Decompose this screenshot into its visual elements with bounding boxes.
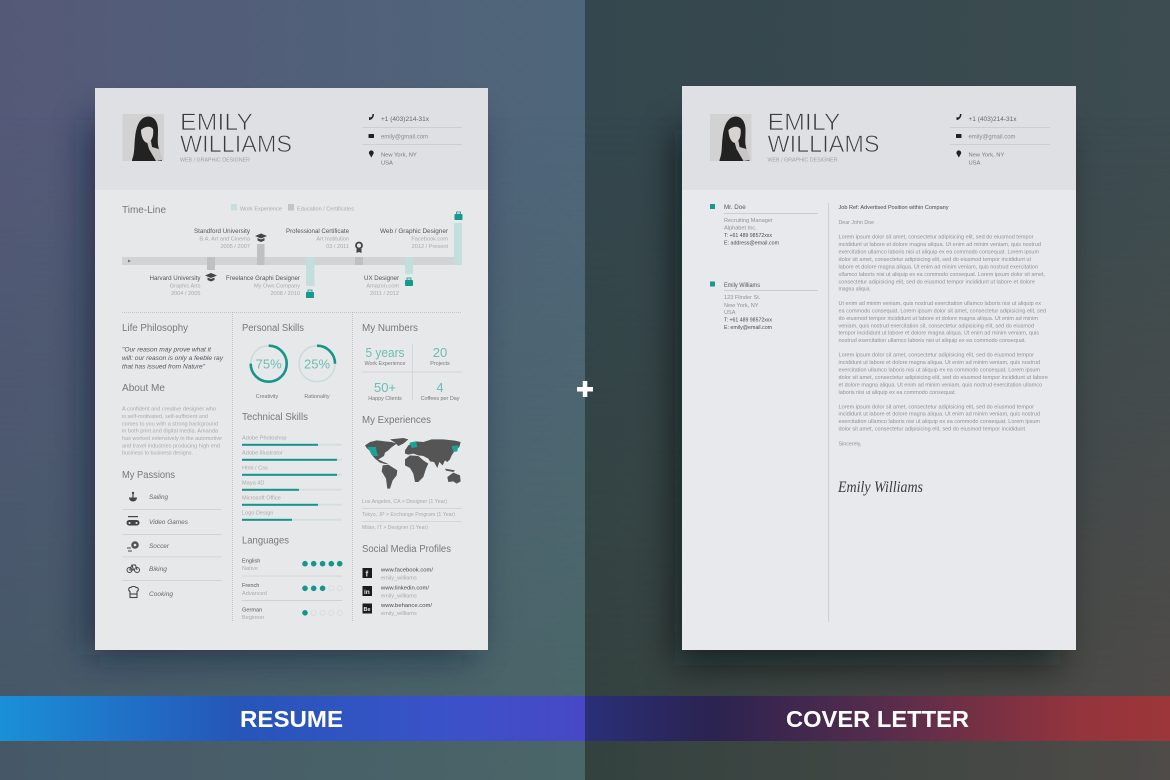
paragraph 1: consectetur adipisicing elit, sed do eiusmod tempor incididunt ut labore et dolore bbox=[838, 279, 1035, 285]
resume header band bbox=[95, 88, 488, 190]
contact details: New York, NY bbox=[381, 152, 417, 158]
quote bbox=[122, 346, 224, 370]
contact details: New York, NY bbox=[968, 152, 1004, 158]
contact details: USA bbox=[381, 160, 393, 166]
timeline entry: Standford: 2005 / 2007 bbox=[220, 244, 250, 250]
icon: plus sign bbox=[577, 381, 593, 397]
heading: my experiences: My Experiences bbox=[362, 415, 431, 426]
profile photo bbox=[122, 114, 164, 161]
donut chart: creativity 75%: Creativity bbox=[256, 394, 279, 400]
heading: technical skills: Technical Skills bbox=[242, 412, 308, 423]
paragraph 2: Ut enim ad minim veniam, quis nostrud exercitation ullamco laboris nisi ut aliquip ex bbox=[838, 301, 1041, 307]
timeline entry: Standford: B.A. Art and Cinema bbox=[199, 236, 251, 242]
social: behance bbox=[362, 603, 432, 617]
banner: cover letter: COVER LETTER bbox=[786, 706, 969, 732]
shadow: resume sheet bbox=[88, 120, 473, 655]
heading: personal skills: Personal Skills bbox=[242, 323, 304, 334]
timeline entry: web designer: Facebook.com bbox=[411, 236, 448, 242]
paragraph 1: ullamco laboris nisi ut aliquip ex ea commodo consequat. Lorem ipsum dolor sit amet, bbox=[838, 272, 1045, 278]
paragraph 3: dolor sit amet, consectetur adipisicing elit, sed do eiusmod tempor incididunt ut labore bbox=[838, 375, 1048, 381]
background: right panel bbox=[585, 0, 1170, 780]
letter body: Job Ref: Advertised Position within Company bbox=[838, 205, 949, 211]
name: EMILY bbox=[768, 109, 840, 136]
skill bars: Microsoft Office bbox=[242, 496, 281, 502]
experience list bbox=[362, 499, 462, 531]
paragraph 3: Lorem ipsum dolor sit amet, consectetur adipisicing elit, sed do eiusmod tempor bbox=[838, 353, 1034, 359]
contact details: USA bbox=[968, 160, 981, 166]
numbers grid: Happy Clients bbox=[368, 396, 402, 402]
language: German: Beginner bbox=[242, 615, 265, 621]
letter body bbox=[837, 205, 1048, 496]
role: WEB / GRAPHIC DESIGNER bbox=[768, 158, 838, 164]
passions list: Biking bbox=[149, 566, 167, 573]
contact details: +1 (403)214-31x bbox=[968, 116, 1017, 123]
numbers grid: 20 bbox=[433, 345, 447, 360]
timeline legend: Education / Certificates bbox=[297, 206, 354, 212]
timeline entry: freelance: 2008 / 2010 bbox=[270, 291, 300, 297]
social: behance: Be bbox=[364, 607, 371, 613]
about text: is self-motivated, self-sufficient and bbox=[122, 414, 208, 420]
timeline entry: freelance: My Own Company bbox=[254, 284, 300, 290]
about text: and travel industries producing high end bbox=[122, 443, 220, 449]
quote: "Our reason may prove what it bbox=[122, 346, 212, 354]
recipient block: Mr. Doe bbox=[724, 204, 746, 211]
skill bars: Adobe Illustrator bbox=[242, 451, 283, 457]
icon: briefcase bbox=[306, 290, 314, 298]
social: behance: www.behance.com/ bbox=[380, 603, 432, 609]
contact details: emily@gmail.com bbox=[381, 134, 428, 140]
column: numbers, experiences, social bbox=[362, 323, 462, 617]
icon: phone bbox=[956, 114, 962, 120]
recipient block: Alphabet Inc. bbox=[724, 226, 757, 232]
timeline chart bbox=[122, 223, 462, 286]
paragraph 1 bbox=[838, 235, 1045, 293]
role: WEB / GRAPHIC DESIGNER bbox=[180, 158, 250, 164]
sender block: T: +61 489 98572xxx bbox=[724, 318, 772, 324]
name: WILLIAMS bbox=[180, 131, 292, 158]
sender block bbox=[710, 282, 818, 331]
icon: phone bbox=[369, 114, 374, 120]
resume paper bbox=[95, 88, 488, 650]
paragraph 3: et dolore magna aliqua. Ut enim ad minim veniam, quis nostrud exercitation ullamco bbox=[838, 382, 1042, 388]
paragraph 2: tempor incididunt ut labore et dolore magna aliqua. Ut enim ad minim veniam, quis bbox=[838, 331, 1039, 337]
paragraph 1: incididunt ut labore et dolore magna aliqua. Ut enim ad minim veniam, quis nostrud bbox=[838, 242, 1041, 248]
paragraph 3: exercitation ullamco laboris nisi ut aliquip ex ea commodo consequat. Lorem ipsum bbox=[838, 368, 1040, 374]
world map bbox=[365, 438, 461, 489]
timeline entry: web designer bbox=[380, 228, 448, 250]
heading: about me: About Me bbox=[122, 383, 165, 394]
recipient block: Recruiting Manager bbox=[724, 218, 773, 224]
numbers grid bbox=[362, 344, 462, 402]
language: German bbox=[242, 608, 342, 621]
contact details bbox=[950, 114, 1050, 166]
icon: briefcase bbox=[405, 278, 413, 286]
timeline entry: certificate: Professional Certificate bbox=[286, 228, 350, 235]
timeline entry: Harvard bbox=[150, 275, 201, 297]
heading: my passions: My Passions bbox=[122, 470, 175, 481]
icon: anchor bbox=[129, 492, 137, 502]
donut chart: creativity 75% bbox=[251, 346, 287, 400]
sender block: Emily Williams bbox=[724, 282, 760, 289]
profile photo bbox=[710, 114, 752, 161]
language: English bbox=[242, 558, 343, 572]
paragraph 1: exercitation ullamco laboris nisi ut aliquip ex ea commodo consequat. Lorem ipsum bbox=[838, 250, 1039, 256]
icon: game controller bbox=[126, 516, 140, 526]
experience list: Los Angeles, CA > Designer (1 Year) bbox=[362, 499, 447, 505]
timeline entry: web designer: 2012 / Present bbox=[412, 244, 448, 250]
heading: my numbers: My Numbers bbox=[362, 323, 418, 334]
name: EMILY bbox=[180, 109, 253, 136]
passions list bbox=[122, 492, 222, 598]
heading: life philosophy: Life Philosophy bbox=[122, 323, 188, 334]
language: English: English bbox=[242, 558, 260, 564]
social: facebook bbox=[362, 568, 433, 582]
timeline entry: Harvard: Graphic Arts bbox=[170, 284, 201, 290]
paragraph 4 bbox=[838, 404, 1040, 433]
paragraph 3 bbox=[838, 353, 1048, 396]
numbers grid: Work Experience bbox=[365, 361, 405, 367]
about text: A confident and creative designer who bbox=[122, 406, 216, 412]
icon: envelope bbox=[368, 134, 374, 138]
icon: award badge bbox=[356, 242, 362, 253]
social: linkedin: emily_williams bbox=[381, 594, 417, 600]
column: skills and languages bbox=[242, 323, 343, 621]
marker bbox=[710, 204, 715, 209]
recipient block: E: address@email.com bbox=[724, 240, 779, 246]
paragraph 2: do eiusmod tempor incididunt ut labore et dolore magna aliqua. Ut enim ad minim bbox=[838, 316, 1038, 322]
about text: business to business designs. bbox=[122, 451, 193, 457]
skill bars: Maya 4D bbox=[242, 481, 264, 487]
quote: will: our reason is only a feeble ray bbox=[122, 355, 224, 362]
heading: time-line: Time-Line bbox=[122, 205, 166, 216]
paragraph 4: exercitation ullamco laboris nisi ut aliquip ex ea commodo consequat. Lorem ipsum bbox=[838, 419, 1040, 425]
paragraph 2: ea commodo consequat. Lorem ipsum dolor sit amet, consectetur adipisicing elit, sed bbox=[838, 308, 1046, 314]
name bbox=[768, 109, 880, 158]
shadow: cover letter sheet bbox=[675, 130, 1060, 665]
social: linkedin bbox=[362, 586, 429, 600]
timeline entry: Harvard: Harvard University bbox=[150, 275, 201, 282]
timeline entry: freelance: Freelance Graphi Designer bbox=[226, 275, 300, 282]
paragraph 4: dolor sit amet, consectetur adipisicing elit, sed do eiusmod tempor incididunt bbox=[838, 427, 1025, 433]
timeline entry: web designer: Web / Graphic Designer bbox=[380, 228, 448, 235]
timeline entry: certificate: Art Institution bbox=[316, 236, 349, 242]
letter body: Dear John Doe bbox=[838, 220, 874, 226]
paragraph 1: labore et dolore magna aliqua. Ut enim ad minim veniam, quis nostrud exercitation bbox=[838, 264, 1038, 270]
language: French: Advanced bbox=[242, 591, 267, 597]
numbers grid: 50+ bbox=[374, 380, 396, 395]
resume sheet bbox=[95, 88, 488, 650]
background: left panel bbox=[0, 0, 585, 780]
icon: graduation cap bbox=[205, 273, 217, 282]
cover letter paper bbox=[682, 86, 1076, 650]
passions list: Soccer bbox=[149, 543, 170, 550]
icon: location pin bbox=[369, 150, 374, 158]
paragraph 1: Lorem ipsum dolor sit amet, consectetur adipisicing elit, sed do eiusmod tempor bbox=[838, 235, 1034, 241]
numbers grid: Projects bbox=[430, 361, 450, 367]
name: WILLIAMS bbox=[768, 131, 880, 158]
contact details: emily@gmail.com bbox=[968, 134, 1016, 140]
timeline entry: freelance bbox=[226, 275, 300, 297]
timeline entry: certificate bbox=[286, 228, 350, 250]
experience list: Milan, IT > Designer (1 Year) bbox=[362, 525, 428, 531]
column: philosophy, about, passions bbox=[122, 323, 224, 598]
timeline entry: Standford bbox=[194, 228, 251, 250]
social: facebook: www.facebook.com/ bbox=[380, 568, 433, 574]
social: facebook: f bbox=[366, 570, 368, 578]
social: behance: emily_williams bbox=[381, 611, 417, 617]
icon: location pin bbox=[956, 150, 961, 158]
donut chart: creativity 75%: 75% bbox=[256, 356, 282, 372]
icon: chef hat bbox=[129, 586, 138, 598]
about text: comes to you with a strong background bbox=[122, 421, 218, 427]
timeline entry: UX: UX Designer bbox=[364, 275, 399, 282]
recipient block bbox=[710, 204, 818, 246]
timeline entry: UX bbox=[364, 275, 399, 297]
paragraph 2: veniam, quis nostrud exercitation sit, consectetur adipisicing elit, sed do eiusmod bbox=[838, 323, 1034, 329]
skill bars: Logo Design bbox=[242, 511, 273, 517]
social: linkedin: in bbox=[364, 589, 370, 596]
icon: envelope bbox=[956, 134, 962, 138]
signature: Emily Williams bbox=[837, 479, 923, 496]
donut chart: rationality 25%: 25% bbox=[304, 356, 330, 372]
timeline entry: Standford: Standford University bbox=[194, 228, 251, 235]
paragraph 3: laboris nisi ut aliquip ex ea commodo consequat. bbox=[838, 390, 956, 396]
timeline entry: UX: Amazon.com bbox=[366, 284, 399, 290]
sender block: E: emily@email.com bbox=[724, 325, 772, 331]
sender block: New York, NY bbox=[724, 303, 759, 309]
language: French: French bbox=[242, 583, 259, 589]
banner: resume: RESUME bbox=[240, 706, 343, 732]
numbers grid: 5 years bbox=[366, 345, 405, 360]
timeline legend: Work Experience bbox=[240, 206, 282, 212]
paragraph 1: magna aliqua. bbox=[838, 287, 871, 293]
sender block: 123 Flinder St. bbox=[724, 295, 761, 301]
timeline entry: certificate: 03 / 2011 bbox=[326, 244, 349, 250]
donut chart: rationality 25%: Rationality bbox=[304, 394, 330, 400]
timeline entry: Harvard: 2004 / 2005 bbox=[171, 291, 200, 297]
paragraph 1: dolor sit amet, consectetur adipisicing elit, sed do eiusmod tempor incididunt ut bbox=[838, 257, 1031, 263]
cover letter header band bbox=[682, 86, 1076, 190]
paragraph 2 bbox=[838, 301, 1046, 344]
icon: briefcase bbox=[454, 212, 462, 220]
social: facebook: emily_williams bbox=[381, 576, 417, 582]
recipient block: T: +61 489 98572xxx bbox=[724, 233, 772, 239]
language: French bbox=[242, 583, 342, 597]
icon: soccer ball bbox=[127, 541, 139, 551]
icon: bicycle bbox=[127, 565, 140, 572]
paragraph 3: incididunt ut labore et dolore magna aliqua. Ut enim ad minim veniam, quis nostrud bbox=[838, 360, 1040, 366]
about text bbox=[122, 406, 222, 457]
banner: cover letter bbox=[585, 696, 1170, 741]
paragraph 2: nostrud exercitation ullamco laboris nisi ut aliquip ex ea commodo consequat. bbox=[838, 338, 1026, 344]
numbers grid: Coffees per Day bbox=[421, 396, 460, 402]
heading: languages: Languages bbox=[242, 536, 289, 546]
letter body: Sincerely, bbox=[838, 442, 862, 448]
name bbox=[180, 109, 292, 158]
contact details bbox=[363, 114, 462, 166]
skill bars: Adobe Photoshop bbox=[242, 436, 286, 442]
passions list: Cooking bbox=[149, 591, 173, 598]
heading: social media profiles: Social Media Profiles bbox=[362, 544, 451, 555]
numbers grid: 4 bbox=[436, 380, 444, 395]
language: German: German bbox=[242, 608, 262, 614]
timeline legend bbox=[231, 204, 354, 212]
about text: has worked extensively in the automotive bbox=[122, 436, 222, 442]
quote: that has issued from Nature" bbox=[122, 364, 206, 370]
banner: resume bbox=[0, 696, 585, 741]
donut chart: rationality 25% bbox=[299, 346, 335, 400]
cover letter sheet bbox=[682, 86, 1076, 650]
skill bars bbox=[242, 436, 342, 521]
paragraph 4: incididunt ut labore et dolore magna aliqua. Ut enim ad minim veniam, quis nostrud bbox=[838, 412, 1040, 418]
skill bars: Html / Css bbox=[242, 466, 268, 472]
paragraph 4: Lorem ipsum dolor sit amet, consectetur adipisicing elit, sed do eiusmod tempor bbox=[838, 404, 1034, 410]
marker bbox=[710, 282, 715, 286]
icon: graduation cap bbox=[255, 234, 267, 242]
contact details: +1 (403)214-31x bbox=[381, 116, 430, 123]
passions list: Video Games bbox=[149, 519, 189, 526]
social: linkedin: www.linkedin.com/ bbox=[380, 586, 429, 592]
about text: in both print and digital media. Amanda bbox=[122, 429, 219, 435]
experience list: Tokyo, JP > Exchange Program (1 Year) bbox=[362, 512, 455, 518]
sender block: USA bbox=[724, 310, 736, 316]
passions list: Sailing bbox=[149, 494, 168, 501]
language: English: Native bbox=[242, 566, 258, 572]
timeline entry: UX: 2011 / 2012 bbox=[370, 291, 399, 297]
